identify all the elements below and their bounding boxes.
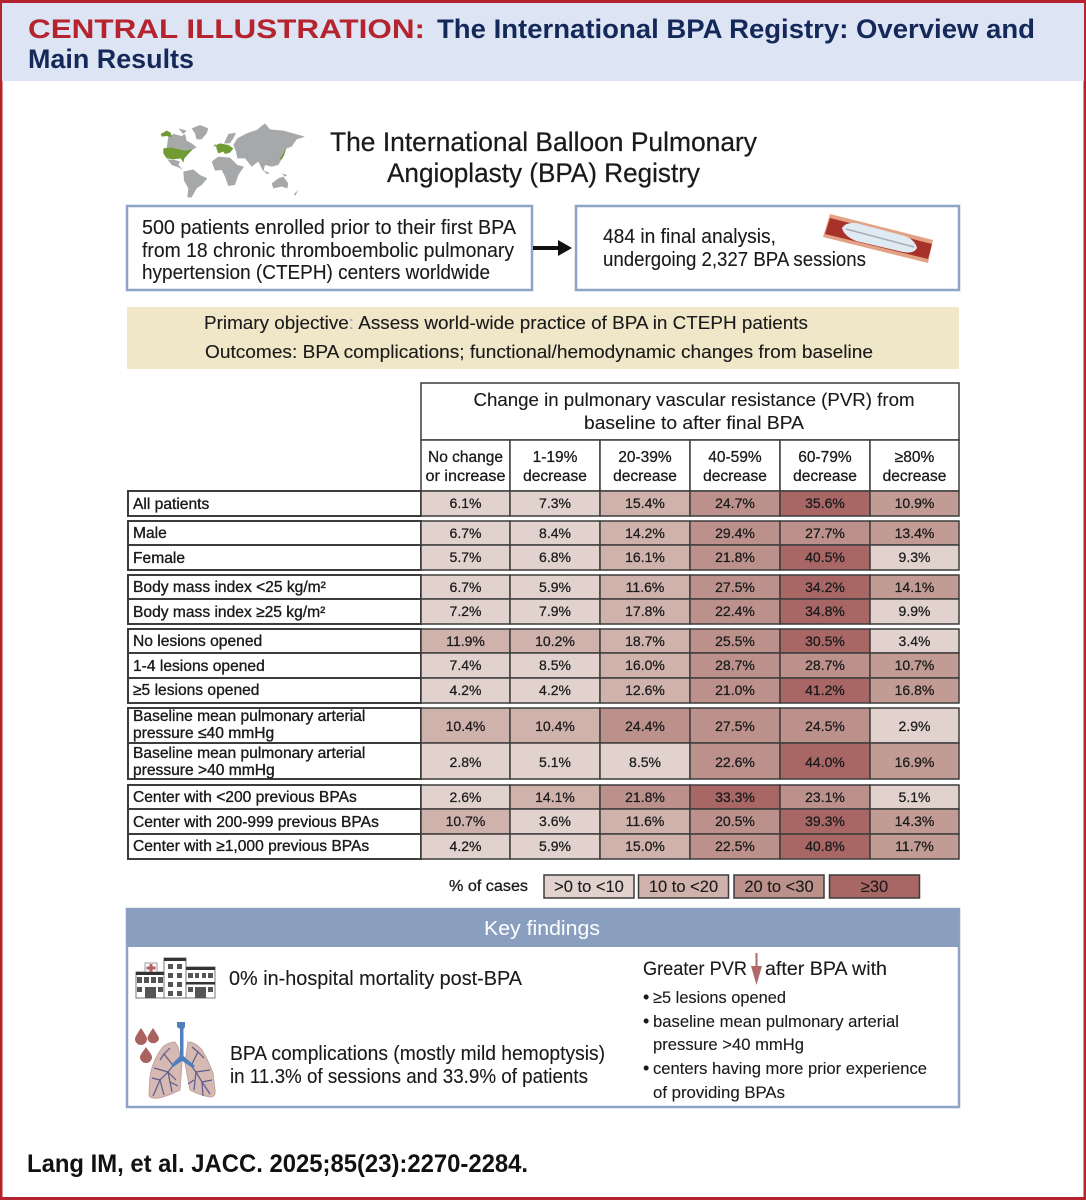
title banner: The International BPA Registry: Overview and	[437, 14, 1035, 44]
row: BMI 25 or more: 22.4%	[715, 603, 755, 619]
legend: percent of cases: % of cases	[449, 878, 528, 895]
table column headers: ≥80%	[895, 449, 934, 466]
table header: PVR change: Change in pulmonary vascular resistance (PVR) from	[474, 390, 914, 410]
row: no lesions opened: 25.5%	[715, 633, 755, 649]
enrollment box	[127, 206, 532, 290]
row: 5 or more lesions opened: 21.0%	[715, 682, 755, 698]
row: baseline pressure above 40: 22.6%	[715, 754, 755, 770]
row: all patients: 10.9%	[895, 495, 934, 511]
text: complications: BPA complications (mostly mild hemoptysis)	[230, 1043, 605, 1065]
row: male: 27.7%	[805, 525, 845, 541]
row: BMI under 25	[128, 575, 959, 599]
text: greater PVR decrease list: ≥5 lesions opened	[653, 988, 786, 1007]
legend: percent of cases: >0 to <10	[554, 878, 624, 896]
table column headers: decrease	[523, 468, 587, 485]
table column headers: decrease	[613, 468, 677, 485]
table column headers: decrease	[703, 468, 767, 485]
row: no lesions opened: 30.5%	[805, 633, 845, 649]
row: center 200-999 BPAs: 14.3%	[895, 813, 934, 829]
row: baseline pressure above 40: 2.8%	[450, 754, 481, 770]
text: greater PVR decrease list: baseline mean pulmonary arterial	[653, 1012, 899, 1031]
row: male: 14.2%	[625, 525, 665, 541]
registry heading: Angioplasty (BPA) Registry	[387, 158, 700, 188]
text: greater PVR decrease list: centers having more prior experience	[653, 1059, 927, 1078]
row: baseline pressure 40 or less	[128, 708, 959, 743]
row: all patients: 7.3%	[539, 495, 571, 511]
text: greater PVR decrease list: after BPA with	[765, 959, 887, 980]
row: male	[128, 521, 959, 545]
row: 1-4 lesions opened	[128, 653, 959, 678]
legend: percent of cases: 10 to <20	[649, 878, 718, 896]
row: center under 200 BPAs: 33.3%	[715, 789, 755, 805]
table column headers: decrease	[883, 468, 946, 485]
row: no lesions opened: 18.7%	[625, 633, 665, 649]
row: no lesions opened: 10.2%	[535, 633, 575, 649]
row: center 1000 or more BPAs: Center with ≥1,000 previous BPAs	[133, 838, 369, 855]
row: baseline pressure above 40: 8.5%	[629, 754, 661, 770]
table column headers: 60-79%	[798, 449, 852, 466]
row: BMI 25 or more: Body mass index ≥25 kg/m²	[133, 604, 325, 621]
table header: PVR change: baseline to after final BPA	[584, 413, 804, 433]
row: 5 or more lesions opened: 4.2%	[539, 682, 571, 698]
row: BMI 25 or more	[128, 599, 959, 624]
row: baseline pressure 40 or less: 24.5%	[805, 718, 845, 734]
row: center 1000 or more BPAs	[128, 834, 959, 859]
row: center 1000 or more BPAs: 40.8%	[805, 838, 845, 854]
table column headers: No change	[428, 449, 503, 466]
enrollment box: from 18 chronic thromboembolic pulmonary	[142, 240, 514, 262]
row: baseline pressure above 40	[128, 743, 959, 779]
table column headers: 20-39%	[618, 449, 672, 466]
row: center under 200 BPAs: 2.6%	[450, 789, 481, 805]
final analysis box: undergoing 2,327 BPA sessions	[603, 249, 866, 271]
text: greater PVR decrease list: •	[643, 987, 649, 1007]
row: male: Male	[133, 525, 167, 542]
row: female	[128, 545, 959, 570]
panel: key findings	[127, 909, 959, 1107]
text: greater PVR decrease list: of providing BPAs	[653, 1083, 785, 1102]
text: greater PVR decrease list: •	[643, 1058, 649, 1078]
row: baseline pressure above 40: 5.1%	[539, 754, 571, 770]
row: BMI under 25: 14.1%	[895, 579, 934, 595]
row: center 200-999 BPAs: 3.6%	[539, 813, 571, 829]
registry heading: The International Balloon Pulmonary	[330, 127, 757, 157]
row: female: Female	[133, 550, 185, 567]
table column headers: or increase	[426, 468, 506, 485]
row: 5 or more lesions opened: 4.2%	[450, 682, 481, 698]
table column headers: 40-59%	[708, 449, 762, 466]
row: all patients: 24.7%	[715, 495, 755, 511]
row: BMI 25 or more: 7.2%	[450, 603, 481, 619]
row: center 1000 or more BPAs: 11.7%	[895, 838, 934, 854]
text: greater PVR decrease list: pressure >40 mmHg	[653, 1035, 804, 1054]
row: all patients	[128, 491, 959, 516]
text: greater PVR decrease list: Greater PVR	[643, 959, 747, 980]
title banner: CENTRAL ILLUSTRATION:	[28, 14, 425, 44]
row: center under 200 BPAs	[128, 785, 959, 809]
row: baseline pressure above 40: 44.0%	[805, 754, 845, 770]
row: BMI under 25: Body mass index <25 kg/m²	[133, 579, 326, 596]
row: baseline pressure 40 or less: Baseline mean pulmonary arterial	[133, 708, 365, 725]
objectives band	[127, 307, 959, 369]
row: baseline pressure 40 or less: 24.4%	[625, 718, 665, 734]
row: center 200-999 BPAs: 10.7%	[446, 813, 485, 829]
row: baseline pressure above 40: 16.9%	[895, 754, 934, 770]
row: center 1000 or more BPAs: 4.2%	[450, 838, 481, 854]
row: 5 or more lesions opened	[128, 678, 959, 703]
row: no lesions opened: 11.9%	[446, 633, 485, 649]
text: complications: in 11.3% of sessions and 33.9% of patients	[230, 1066, 588, 1088]
row: 1-4 lesions opened: 7.4%	[450, 657, 481, 673]
row: all patients: 15.4%	[625, 495, 665, 511]
table column headers: 1-19%	[533, 449, 578, 466]
row: center 1000 or more BPAs: 22.5%	[715, 838, 755, 854]
row: 5 or more lesions opened: 16.8%	[895, 682, 934, 698]
row: male: 13.4%	[895, 525, 934, 541]
table column headers: decrease	[793, 468, 857, 485]
enrollment box: 500 patients enrolled prior to their first BPA	[142, 217, 517, 239]
text: greater PVR decrease list	[643, 953, 927, 1102]
key findings heading	[127, 909, 959, 947]
row: BMI under 25: 5.9%	[539, 579, 571, 595]
text: greater PVR decrease list: •	[643, 1011, 649, 1031]
icon: balloon in vessel	[823, 214, 933, 263]
registry heading	[330, 127, 757, 188]
final analysis box	[576, 206, 959, 290]
row: BMI under 25: 34.2%	[805, 579, 845, 595]
title banner	[2, 3, 1084, 81]
arrow: enrollment to analysis	[533, 240, 572, 256]
row: 1-4 lesions opened: 28.7%	[715, 657, 755, 673]
row: baseline pressure above 40: pressure >40 mmHg	[133, 762, 275, 779]
key findings heading: Key findings	[484, 918, 600, 940]
row: 1-4 lesions opened: 1-4 lesions opened	[133, 658, 265, 675]
row: all patients: 6.1%	[450, 495, 481, 511]
table header: PVR change	[421, 383, 959, 440]
row: all patients: All patients	[133, 496, 209, 513]
row: baseline pressure 40 or less: 27.5%	[715, 718, 755, 734]
icon: hospital	[136, 958, 215, 998]
row: male: 29.4%	[715, 525, 755, 541]
row: BMI 25 or more: 7.9%	[539, 603, 571, 619]
row: BMI under 25: 6.7%	[450, 579, 481, 595]
row: female: 40.5%	[805, 549, 845, 565]
row: center 1000 or more BPAs: 5.9%	[539, 838, 571, 854]
row: baseline pressure above 40: Baseline mean pulmonary arterial	[133, 745, 365, 762]
row: no lesions opened	[128, 629, 959, 653]
row: baseline pressure 40 or less: 10.4%	[535, 718, 575, 734]
row: 1-4 lesions opened: 28.7%	[805, 657, 845, 673]
objectives band: Primary objective: Assess world-wide practice of BPA in CTEPH patients	[204, 312, 808, 333]
row: BMI 25 or more: 9.9%	[899, 603, 930, 619]
row: female: 21.8%	[715, 549, 755, 565]
row: 5 or more lesions opened: ≥5 lesions opened	[133, 682, 259, 699]
text: mortality: 0% in-hospital mortality post-BPA	[229, 968, 523, 990]
row: 5 or more lesions opened: 41.2%	[805, 682, 845, 698]
row: center 200-999 BPAs: Center with 200-999 previous BPAs	[133, 814, 379, 831]
row: female: 16.1%	[625, 549, 665, 565]
row: male: 6.7%	[450, 525, 481, 541]
text: complications	[230, 1043, 605, 1088]
row: center 1000 or more BPAs: 15.0%	[625, 838, 665, 854]
icon: world map	[161, 123, 305, 197]
row: center 200-999 BPAs: 20.5%	[715, 813, 755, 829]
citation: Lang IM, et al. JACC. 2025;85(23):2270-2284.	[27, 1150, 528, 1178]
row: female: 6.8%	[539, 549, 571, 565]
row: 5 or more lesions opened: 12.6%	[625, 682, 665, 698]
legend: percent of cases: 20 to <30	[744, 878, 814, 896]
icon: lungs and blood drops	[135, 1022, 215, 1098]
row: BMI under 25: 11.6%	[626, 579, 664, 595]
row: 1-4 lesions opened: 8.5%	[539, 657, 571, 673]
row: BMI 25 or more: 17.8%	[625, 603, 665, 619]
row: all patients: 35.6%	[805, 495, 845, 511]
row: center under 200 BPAs: 21.8%	[625, 789, 665, 805]
arrow: decrease	[751, 953, 762, 985]
row: center under 200 BPAs: 14.1%	[535, 789, 575, 805]
row: BMI 25 or more: 34.8%	[805, 603, 845, 619]
row: BMI under 25: 27.5%	[715, 579, 755, 595]
row: baseline pressure 40 or less: 2.9%	[899, 718, 930, 734]
row: baseline pressure 40 or less: pressure ≤40 mmHg	[133, 725, 274, 742]
title banner: Main Results	[28, 44, 194, 74]
row: center under 200 BPAs: Center with <200 previous BPAs	[133, 789, 357, 806]
row: no lesions opened: 3.4%	[899, 633, 930, 649]
row: male: 8.4%	[539, 525, 571, 541]
legend: percent of cases: ≥30	[861, 878, 888, 896]
row: female: 5.7%	[450, 549, 481, 565]
row: center 200-999 BPAs: 39.3%	[805, 813, 845, 829]
row: center under 200 BPAs: 23.1%	[805, 789, 845, 805]
objectives band: Outcomes: BPA complications; functional/hemodynamic changes from baseline	[205, 341, 873, 362]
row: center 200-999 BPAs	[128, 809, 959, 834]
table column headers	[421, 440, 959, 491]
row: baseline pressure 40 or less: 10.4%	[446, 718, 485, 734]
row: 1-4 lesions opened: 16.0%	[625, 657, 665, 673]
row: center under 200 BPAs: 5.1%	[899, 789, 930, 805]
row: 1-4 lesions opened: 10.7%	[895, 657, 934, 673]
enrollment box: hypertension (CTEPH) centers worldwide	[142, 262, 490, 284]
final analysis box: 484 in final analysis,	[603, 226, 776, 248]
legend: percent of cases	[449, 875, 920, 898]
row: center 200-999 BPAs: 11.6%	[626, 813, 664, 829]
row: female: 9.3%	[899, 549, 930, 565]
row: no lesions opened: No lesions opened	[133, 633, 262, 650]
